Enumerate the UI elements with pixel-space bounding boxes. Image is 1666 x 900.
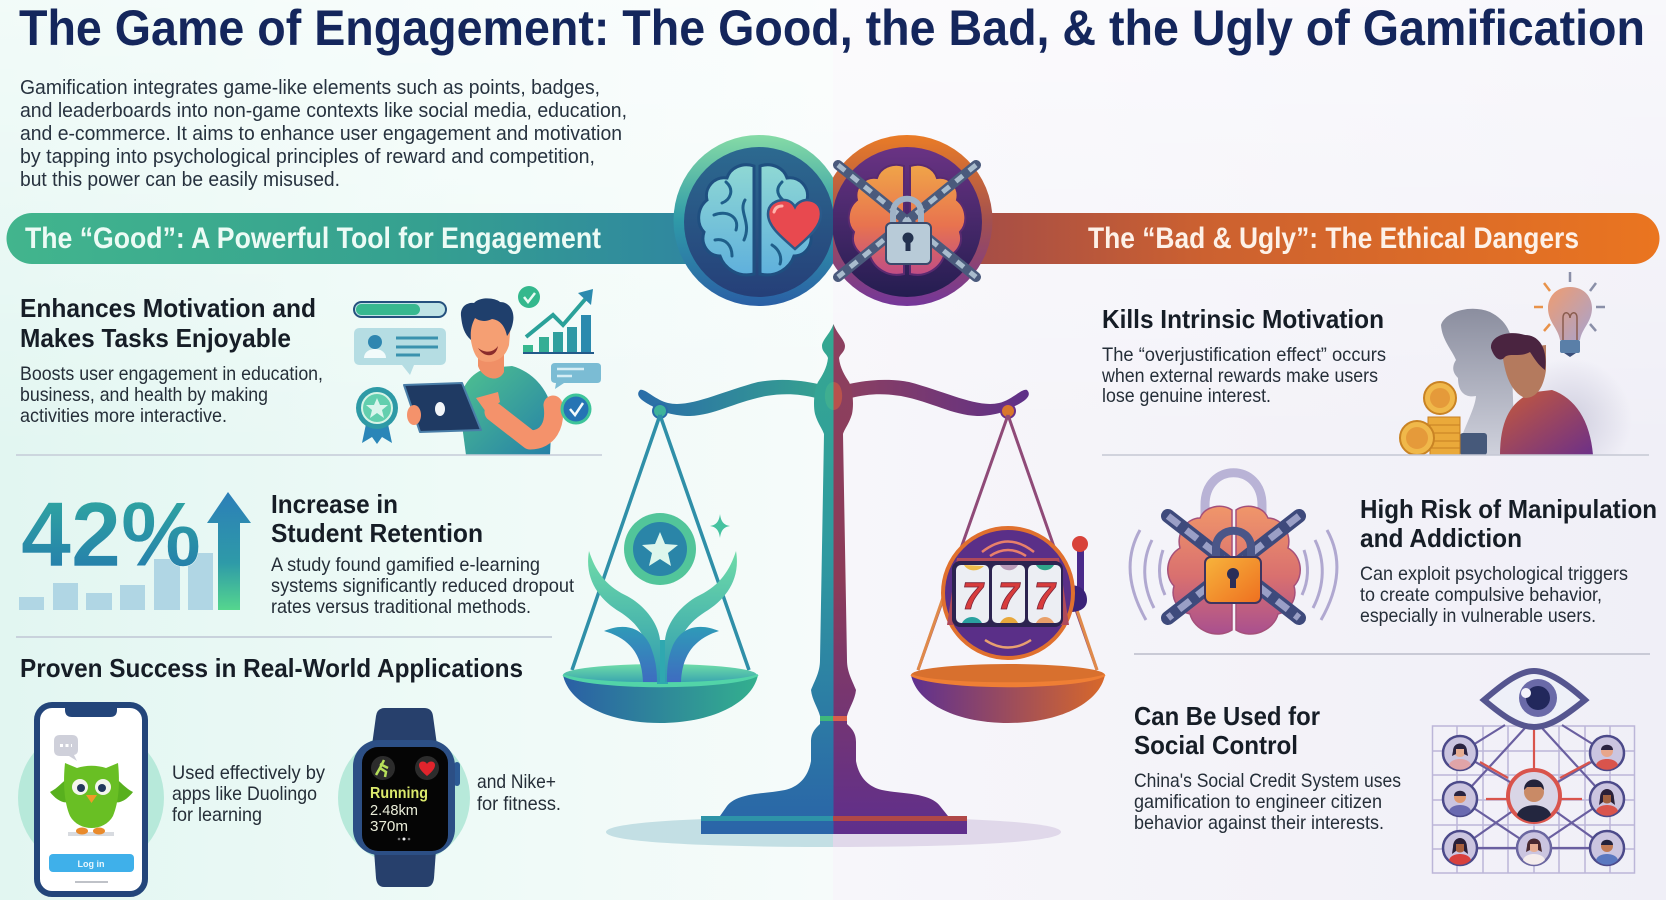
icon: profile card (354, 328, 446, 375)
text: nike: and Nike+ (477, 771, 556, 793)
icon: smartwatch: 370m (370, 818, 408, 835)
panel: 42 percent statistic (19, 484, 575, 618)
icon: slot machine: 7 (962, 576, 985, 618)
icon: brain with heart (674, 135, 844, 306)
big number: 42% (21, 484, 201, 586)
body text: Can exploit psychological triggers (1360, 563, 1628, 585)
panel: kills intrinsic motivation (1102, 272, 1616, 454)
icon: person with tablet (404, 298, 554, 455)
banner: the good: The “Good”: A Powerful Tool for Engagement (25, 222, 601, 255)
icon: surveillance network (1432, 671, 1635, 873)
heading: Increase in (271, 489, 398, 519)
heading: Proven Success in Real-World Applications (20, 653, 523, 683)
heading: Student Retention (271, 518, 483, 548)
panel: social control (1134, 671, 1635, 873)
body text: A study found gamified e-learning (271, 554, 540, 576)
left pan (563, 664, 758, 723)
body text (20, 363, 323, 427)
icon: slot machine: 7 (998, 576, 1021, 618)
icon: slot machine (943, 528, 1088, 658)
intro text block: Gamification integrates game-like elements such as points, badges, (20, 77, 600, 99)
body text (1134, 770, 1401, 834)
arrow (207, 492, 251, 610)
icon: award rosette (356, 387, 398, 444)
body text (1101, 344, 1386, 407)
panel: real-world applications (18, 653, 561, 894)
body text: The “overjustification effect” occurs (1102, 344, 1386, 366)
icon: heart (768, 200, 821, 249)
icon: padlock (886, 199, 931, 264)
body text: business, and health by making (20, 384, 268, 406)
heading (1134, 701, 1320, 760)
heading: Enhances Motivation and (20, 293, 316, 323)
body text: gamification to engineer citizen (1134, 791, 1382, 813)
heading: and Addiction (1360, 523, 1522, 553)
panel: manipulation and addiction (1130, 473, 1657, 634)
chart: balance scale (563, 324, 1105, 847)
text: duolingo: for learning (172, 804, 262, 826)
heading (271, 489, 483, 548)
icon: smartwatch: 2.48km (370, 802, 418, 819)
icon: eye (1484, 671, 1585, 727)
body text: to create compulsive behavior, (1360, 584, 1602, 606)
icon: growth chart (523, 289, 594, 353)
right pan (911, 664, 1105, 723)
text: duolingo: Used effectively by (172, 762, 325, 784)
heading: Makes Tasks Enjoyable (20, 323, 291, 353)
body text: Boosts user engagement in education, (20, 363, 323, 385)
left half of scale (572, 324, 834, 834)
network nodes (1443, 736, 1624, 865)
heading (20, 293, 316, 353)
banner: the bad and ugly (960, 213, 1660, 264)
text: duolingo (172, 762, 325, 826)
icon: progress bar (354, 302, 446, 317)
icon: verified check (560, 394, 592, 424)
intro text block: and e-commerce. It aims to enhance user engagement and motivation (20, 123, 622, 145)
intro text block: but this power can be easily misused. (20, 169, 340, 191)
body text: when external rewards make users (1101, 365, 1378, 387)
intro text block (20, 77, 627, 191)
bar chart (19, 553, 213, 610)
heading: Social Control (1134, 730, 1298, 760)
body text: activities more interactive. (20, 405, 227, 427)
icon: check badge (518, 286, 540, 308)
icon: chained brain with padlock (822, 135, 992, 306)
icon: light bulb (1534, 272, 1605, 357)
body text (1360, 563, 1628, 627)
icon: person with shadow self and coins (1399, 308, 1616, 454)
body text: behavior against their interests. (1134, 812, 1384, 834)
banner: the bad and ugly: The “Bad & Ugly”: The Ethical Dangers (1088, 222, 1579, 255)
icon: slot machine: 7 (1034, 576, 1057, 618)
panel: enhances motivation (20, 286, 601, 455)
body text: rates versus traditional methods. (271, 596, 531, 618)
icon: phone with owl (18, 704, 164, 894)
scale shadow (606, 817, 1061, 847)
body text: China's Social Credit System uses (1134, 770, 1401, 792)
icon: plant with star badge (588, 513, 737, 684)
banner: the good (7, 213, 700, 264)
heading (1360, 494, 1657, 553)
body text: especially in vulnerable users. (1360, 605, 1596, 627)
intro text block: by tapping into psychological principles of reward and competition, (20, 146, 595, 168)
body text (271, 554, 575, 618)
intro text block: and leaderboards into non-game contexts like social media, education, (20, 100, 627, 122)
icon: smartwatch: Running (370, 785, 428, 802)
heading: Kills Intrinsic Motivation (1102, 304, 1384, 334)
heading: Can Be Used for (1134, 701, 1320, 731)
icon: smartwatch (338, 708, 470, 887)
text: nike: for fitness. (477, 793, 561, 815)
right half of scale (833, 324, 1097, 834)
body text: lose genuine interest. (1102, 385, 1271, 407)
icon: chat bubble (551, 363, 601, 389)
text: nike (477, 771, 561, 815)
icon: phone with owl: Log in (78, 859, 104, 869)
icon: chained brain with lock (1130, 473, 1337, 634)
text: duolingo: apps like Duolingo (172, 783, 317, 805)
body text: systems significantly reduced dropout (271, 575, 575, 597)
